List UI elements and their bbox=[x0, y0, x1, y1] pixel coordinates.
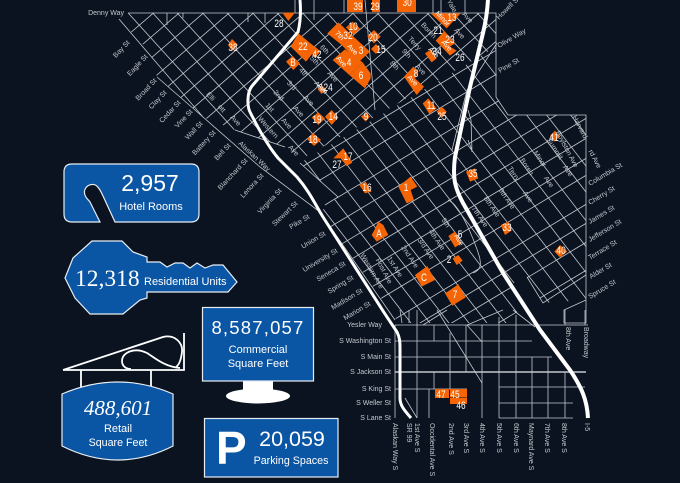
street labels: east and south: 5th Ave S bbox=[495, 423, 502, 453]
marker numbers: 27 bbox=[332, 159, 342, 171]
street labels: avenues: 8th bbox=[388, 60, 400, 72]
marker numbers: A bbox=[376, 228, 382, 240]
street labels: west ends: Yesler Way bbox=[347, 322, 382, 329]
street labels: avenues: Ave bbox=[279, 117, 293, 131]
marker numbers: 15 bbox=[376, 44, 386, 56]
street labels: west ends: S Jackson St bbox=[350, 369, 391, 376]
stat: parking spaces: Parking Spaces bbox=[254, 455, 328, 467]
street labels: avenues: Boren bbox=[518, 157, 534, 177]
marker numbers: 33 bbox=[502, 222, 512, 234]
marker numbers: 9 bbox=[364, 111, 368, 123]
marker numbers: C bbox=[421, 272, 427, 284]
street labels: avenues: Terry bbox=[406, 36, 422, 52]
marker numbers: 17 bbox=[343, 151, 353, 163]
marker numbers: 13 bbox=[447, 12, 457, 24]
marker numbers: 29 bbox=[370, 1, 380, 13]
stat: retail square feet hanging sign: Square Feet bbox=[89, 437, 147, 449]
street labels: west ends: Spring St bbox=[327, 275, 355, 296]
street labels: west ends: Alaskan Way bbox=[237, 140, 271, 173]
street labels: east and south: Alder St bbox=[588, 262, 613, 281]
stat: residential units key: 12,318 bbox=[75, 266, 140, 292]
street labels: west ends: Stewart St bbox=[271, 200, 299, 228]
stat: retail square feet hanging sign: Retail bbox=[104, 423, 132, 435]
street labels: avenues: 9th Ave bbox=[497, 188, 516, 211]
street labels: east and south: Alaskan Way S bbox=[391, 423, 398, 471]
street labels: avenues: 2nd bbox=[272, 89, 285, 103]
street labels: east and south: 7th Ave S bbox=[543, 423, 550, 453]
street labels: west ends: Cedar St bbox=[159, 100, 182, 125]
street labels: east and south: 8th Ave S bbox=[560, 423, 567, 453]
stat: hotel rooms door hanger: 2,957 bbox=[121, 170, 179, 196]
street labels: avenues: Elli bbox=[204, 91, 216, 103]
street labels: avenues: Post Ave bbox=[374, 258, 393, 285]
street labels: avenues: Ave bbox=[228, 114, 242, 128]
street labels: east and south: Pine St bbox=[498, 57, 521, 75]
street labels: avenues: rd Ave bbox=[587, 149, 602, 170]
marker numbers: 2 bbox=[447, 254, 451, 266]
street labels: east and south: Cherry St bbox=[587, 185, 616, 207]
street labels: avenues: Minor bbox=[531, 150, 547, 169]
stat: commercial square feet monitor: Commercial bbox=[229, 344, 287, 356]
street labels: west ends: Wall St bbox=[184, 121, 204, 141]
street labels: avenues: Ave bbox=[460, 11, 474, 25]
street labels: avenues: Ave bbox=[345, 43, 359, 57]
street labels: east and south: 1st Ave S bbox=[413, 423, 420, 453]
street labels: west ends: University St bbox=[302, 248, 339, 274]
marker numbers: 21 bbox=[433, 25, 443, 37]
street labels: avenues: Ave bbox=[561, 164, 574, 178]
street labels: avenues: Ave bbox=[312, 80, 326, 94]
marker numbers: 14 bbox=[328, 111, 338, 123]
street labels: west ends: Clay St bbox=[148, 90, 169, 111]
street labels: avenues: ern bbox=[267, 128, 279, 140]
street labels: east and south: SR 99 bbox=[405, 423, 412, 443]
street labels: west ends: S Lane St bbox=[360, 415, 391, 422]
street labels: east and south: James St bbox=[587, 205, 616, 226]
marker numbers: 11 bbox=[427, 100, 435, 112]
street labels: west ends: Marion St bbox=[343, 301, 372, 322]
marker numbers: 24 bbox=[323, 82, 333, 94]
marker numbers: 34 bbox=[432, 46, 442, 58]
marker numbers: 6 bbox=[359, 70, 363, 82]
street labels: west ends: Bay St bbox=[112, 40, 131, 59]
street labels: east and south: Maynard Ave S bbox=[527, 423, 534, 471]
marker numbers: 19 bbox=[312, 114, 322, 126]
stat: commercial square feet monitor: 8,587,057 bbox=[211, 317, 305, 338]
street labels: avenues: Minor bbox=[434, 10, 451, 28]
stat: residential units key bbox=[65, 241, 237, 314]
marker numbers: 40 bbox=[556, 245, 566, 257]
marker numbers: 16 bbox=[362, 182, 372, 194]
street labels: avenues: 4th Ave bbox=[427, 229, 446, 252]
street labels: avenues: Ave bbox=[334, 55, 348, 69]
street labels: avenues: Terry bbox=[506, 166, 521, 183]
stat: parking spaces: P bbox=[216, 422, 247, 474]
street labels: avenues: 2nd Ave bbox=[399, 245, 419, 270]
street labels: avenues: Boylston Ave bbox=[554, 130, 579, 169]
marker numbers: 23 bbox=[445, 34, 455, 46]
street labels: west ends: S Main St bbox=[361, 354, 391, 361]
street labels: west ends: S Washington St bbox=[339, 338, 391, 345]
highway: I-5 bbox=[454, 0, 588, 418]
marker numbers: 20 bbox=[368, 32, 378, 44]
street labels: west ends: Union St bbox=[300, 231, 327, 251]
street labels: avenues: West bbox=[256, 116, 272, 132]
street labels: west ends: Denny Way bbox=[88, 10, 124, 17]
street labels: avenues: Ave bbox=[413, 63, 427, 77]
marker numbers: B bbox=[290, 57, 296, 69]
street labels: west ends: Broad St bbox=[135, 78, 158, 102]
street labels: east and south: 4th Ave S bbox=[478, 423, 485, 453]
street labels: avenues: 5th bbox=[308, 55, 320, 67]
marker numbers: 25 bbox=[437, 111, 447, 123]
stat: residential units key: Residential Units bbox=[144, 276, 227, 288]
street labels: west ends: S Weller St bbox=[356, 400, 391, 407]
street labels: avenues: Ave bbox=[521, 190, 534, 204]
street labels: avenues: 9th bbox=[400, 48, 412, 60]
street labels: east and south: I-5 bbox=[583, 423, 590, 431]
street labels: avenues: 4th bbox=[297, 67, 309, 79]
marker numbers: 38 bbox=[228, 42, 238, 54]
map: street grid bbox=[118, 0, 588, 418]
stat: hotel rooms door hanger: Hotel Rooms bbox=[119, 201, 183, 213]
marker numbers: 7 bbox=[453, 289, 457, 301]
street labels: avenues: Harvard bbox=[570, 115, 588, 140]
street labels: west ends: Blanchard St bbox=[217, 158, 249, 192]
street labels: avenues bbox=[204, 0, 602, 290]
stat: hotel rooms door hanger bbox=[64, 164, 199, 222]
street labels: avenues: Ave bbox=[542, 175, 555, 189]
marker numbers: 18 bbox=[308, 134, 318, 146]
marker numbers: 4 bbox=[347, 57, 352, 69]
street labels: avenues: Ave bbox=[426, 46, 440, 60]
street labels: avenues: Boren bbox=[419, 22, 437, 40]
street labels: avenues: 7th Ave bbox=[470, 206, 489, 229]
marker numbers: 5 bbox=[458, 229, 462, 241]
street labels: east and south: Occidental Ave S bbox=[428, 423, 435, 477]
marker numbers: 45 bbox=[450, 389, 460, 401]
street labels: avenues: 1st Ave bbox=[385, 256, 403, 279]
marker numbers: 32 bbox=[343, 30, 353, 42]
street labels: east and south: 2nd Ave S bbox=[447, 423, 454, 455]
street labels: west ends: Bell St bbox=[214, 143, 232, 162]
marker numbers: 47 bbox=[436, 389, 446, 401]
street labels: avenues: 3rd Ave bbox=[416, 237, 435, 261]
street labels: avenues: 5th bbox=[440, 217, 451, 229]
street labels: west ends bbox=[88, 10, 391, 422]
street labels: east and south bbox=[391, 0, 624, 477]
street labels: avenues: Ave bbox=[291, 105, 305, 119]
stat: parking spaces bbox=[204, 418, 338, 477]
street labels: avenues: Ave bbox=[315, 82, 329, 96]
street labels: avenues: Ave bbox=[405, 74, 419, 88]
street labels: avenues: Ave bbox=[325, 70, 339, 84]
street labels: west ends: Seneca St bbox=[316, 261, 347, 283]
street labels: west ends: Lenora St bbox=[240, 173, 265, 200]
street labels: avenues: 8th Ave bbox=[482, 196, 501, 219]
marker numbers: 35 bbox=[468, 168, 478, 180]
stat: retail square feet hanging sign: 488,601 bbox=[84, 396, 152, 420]
street labels: avenues: 3rd bbox=[285, 80, 297, 92]
street labels: east and south: 8th Ave bbox=[564, 327, 571, 350]
marker numbers: 1 bbox=[404, 182, 408, 194]
highway: SR 99 bbox=[248, 0, 411, 418]
street labels: east and south: Columbia St bbox=[587, 162, 624, 188]
street labels: avenues: Ave bbox=[439, 39, 453, 53]
marker numbers: 42 bbox=[312, 49, 322, 61]
marker numbers: 28 bbox=[274, 18, 284, 30]
street labels: east and south: Spruce St bbox=[587, 279, 617, 301]
street labels: avenues: Ave bbox=[452, 233, 464, 247]
street labels: east and south: 3rd Ave S bbox=[462, 423, 469, 454]
street labels: east and south: 6th Ave S bbox=[512, 423, 519, 453]
street labels: east and south: Broadway bbox=[582, 327, 589, 359]
street labels: avenues: 7th bbox=[333, 30, 345, 42]
development markers bbox=[228, 0, 567, 404]
marker numbers: 41 bbox=[549, 132, 559, 144]
street labels: west ends: Madison St bbox=[330, 288, 364, 312]
street labels: avenues: Ave bbox=[452, 27, 466, 41]
street labels: avenues: ott bbox=[216, 104, 226, 114]
stat: parking spaces: 20,059 bbox=[259, 427, 325, 451]
marker numbers: 46 bbox=[456, 400, 466, 412]
street labels: avenues: Summit bbox=[545, 137, 564, 161]
street labels: west ends: Battery St bbox=[191, 130, 218, 157]
marker numbers: 22 bbox=[298, 41, 308, 53]
street labels: east and south: Jefferson St bbox=[587, 219, 623, 244]
street labels: west ends: Vine St bbox=[174, 109, 194, 130]
street labels: avenues: 6th bbox=[318, 44, 330, 56]
stat: commercial square feet monitor bbox=[202, 308, 314, 404]
street labels: avenues: Ave bbox=[286, 144, 300, 158]
marker numbers: 39 bbox=[353, 1, 363, 13]
marker numbers: 8 bbox=[414, 68, 418, 80]
street labels: west ends: Pike St bbox=[288, 214, 311, 231]
street labels: east and south: Olive Way bbox=[496, 28, 528, 50]
stat: retail square feet hanging sign bbox=[62, 333, 184, 460]
street labels: avenues: Ave bbox=[301, 94, 315, 108]
street labels: east and south: Terrace St bbox=[587, 239, 618, 262]
street labels: west ends: S King St bbox=[362, 386, 391, 393]
street labels: west ends: Eagle St bbox=[126, 54, 149, 78]
street labels: avenues: 1st bbox=[263, 102, 275, 114]
marker numbers: 3 bbox=[359, 45, 363, 57]
marker numbers bbox=[228, 0, 566, 412]
marker numbers: 26 bbox=[455, 52, 465, 64]
marker numbers: 10 bbox=[348, 21, 358, 33]
street labels: avenues: Western Ave bbox=[358, 252, 384, 290]
street labels: west ends: Virginia St bbox=[257, 188, 283, 216]
stat: commercial square feet monitor: Square Feet bbox=[228, 358, 288, 370]
